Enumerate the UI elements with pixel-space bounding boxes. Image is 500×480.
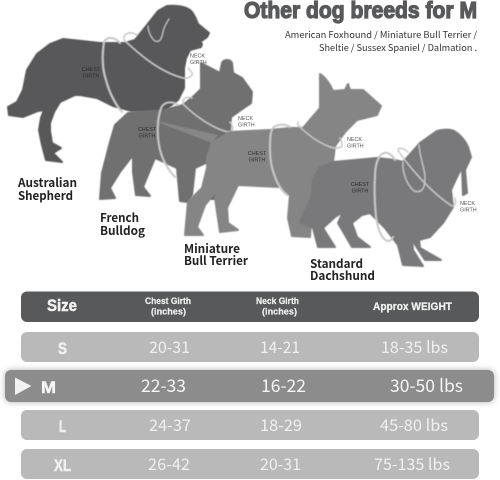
dog: Standard Dachshund xyxy=(300,130,471,266)
terrier chest label: GIRTH xyxy=(249,158,265,164)
table header: Size xyxy=(47,296,77,315)
dog: Miniature Bull Terrier xyxy=(185,74,381,237)
bulldog highlight strap xyxy=(152,120,218,143)
terrier chest label: CHEST xyxy=(248,151,266,157)
row XL xyxy=(21,449,479,479)
breed labels: Bull Terrier xyxy=(184,252,249,269)
breed labels: Dachshund xyxy=(310,267,375,284)
dog: French Bulldog xyxy=(100,60,252,202)
dachshund chest label: GIRTH xyxy=(352,188,368,194)
breed list: Sheltie / Sussex Spaniel / Dalmation . xyxy=(319,41,477,54)
row L: 24-37 xyxy=(149,412,191,436)
breed labels: Shepherd xyxy=(18,187,73,204)
neck label 3: NECK xyxy=(347,137,362,143)
row L: 45-80 lbs xyxy=(380,412,448,436)
shepherd chest label: CHEST xyxy=(82,67,100,73)
table header xyxy=(21,292,479,322)
row M highlighted xyxy=(5,370,494,402)
dachshund chest girth line xyxy=(375,153,395,241)
neck label 4: NECK xyxy=(460,201,475,207)
row XL: 26-42 xyxy=(148,451,190,475)
neck label 1: NECK xyxy=(190,54,205,60)
shepherd chest girth line xyxy=(103,38,122,112)
breed labels: Australian xyxy=(17,174,77,191)
breed labels: Standard xyxy=(310,255,363,272)
table header: Neck Girth xyxy=(256,296,299,306)
table header: (inches) xyxy=(262,306,297,316)
shepherd neck girth line xyxy=(124,33,192,78)
bulldog chest label: GIRTH xyxy=(139,134,155,140)
dachshund chest label: CHEST xyxy=(351,182,369,188)
shepherd chest label: GIRTH xyxy=(83,74,99,80)
row M highlighted: 22-33 xyxy=(141,373,186,398)
breed labels: French xyxy=(100,209,139,226)
row S: S xyxy=(58,340,67,358)
row S xyxy=(21,332,479,362)
breed list: American Foxhound / Miniature Bull Terrier / xyxy=(285,28,477,41)
row S: 14-21 xyxy=(260,334,300,358)
row M highlighted: 30-50 lbs xyxy=(390,373,463,398)
row XL: 75-135 lbs xyxy=(374,451,450,475)
neck label 3: GIRTH xyxy=(347,144,364,150)
row L: 18-29 xyxy=(260,412,302,436)
breed labels: Bulldog xyxy=(100,222,145,239)
neck label 4: GIRTH xyxy=(460,208,477,214)
table header: Chest Girth xyxy=(145,296,191,306)
neck label 2: GIRTH xyxy=(238,122,255,128)
terrier chest girth line xyxy=(270,125,290,195)
row S: 20-31 xyxy=(149,334,190,358)
neck label 1: GIRTH xyxy=(190,60,207,66)
icon: arrow xyxy=(15,378,32,395)
row M highlighted: M xyxy=(41,378,56,397)
bulldog neck girth line xyxy=(183,97,233,132)
shepherd ear line xyxy=(148,19,169,41)
table header: Approx WEIGHT xyxy=(373,301,452,313)
terrier neck girth line xyxy=(298,122,342,148)
breed list xyxy=(285,28,477,54)
dog: Australian Shepherd xyxy=(8,6,209,162)
breed labels xyxy=(17,174,375,284)
dachshund ear line xyxy=(403,145,425,192)
row XL: XL xyxy=(54,457,71,475)
row L: L xyxy=(59,418,66,436)
row M highlighted: 16-22 xyxy=(261,373,306,398)
row L xyxy=(21,410,479,440)
row XL: 20-31 xyxy=(260,451,301,475)
dachshund neck girth line xyxy=(398,148,456,206)
neck label 2: NECK xyxy=(238,116,253,122)
bulldog chest girth line xyxy=(158,102,178,177)
table header: (inches) xyxy=(151,306,186,316)
row S: 18-35 lbs xyxy=(381,334,448,358)
bulldog chest label: CHEST xyxy=(138,127,156,133)
breed labels: Miniature xyxy=(184,240,240,257)
